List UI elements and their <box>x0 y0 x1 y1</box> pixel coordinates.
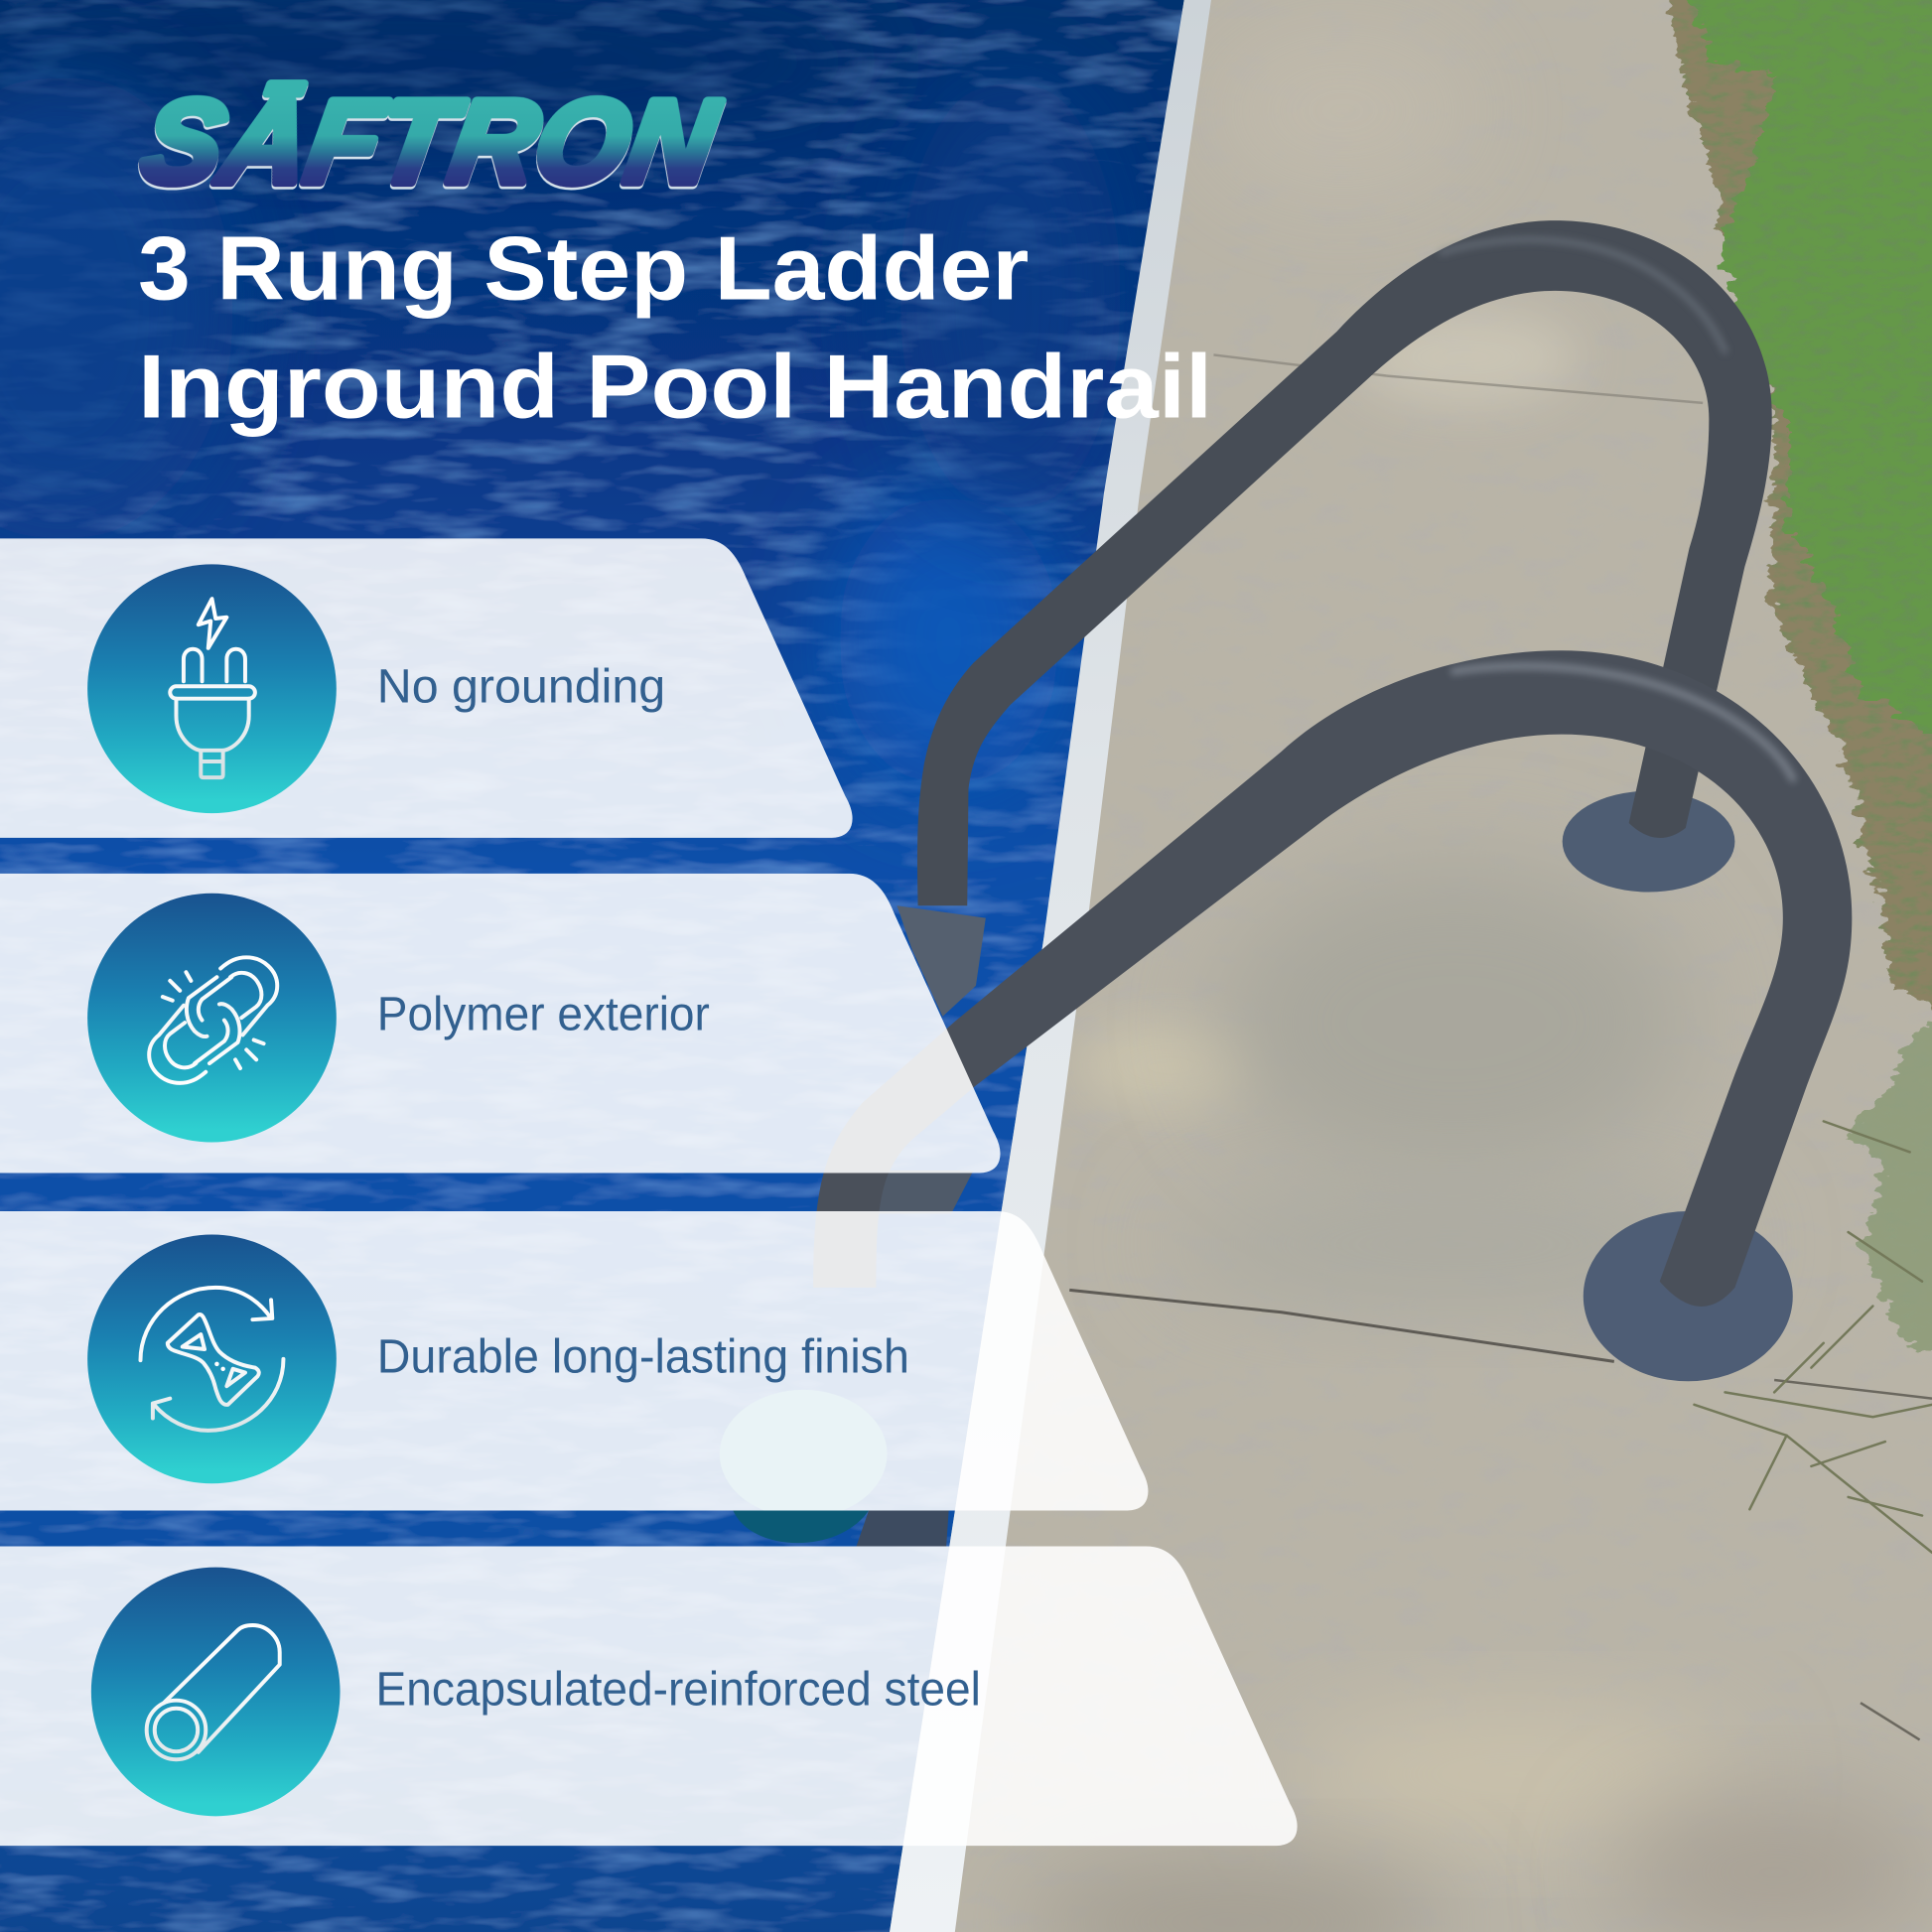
text: polymer exterior: Polymer exterior <box>377 988 710 1041</box>
text: encapsulated-reinforced steel: Encapsulated-reinforced steel <box>376 1663 981 1717</box>
panel: durable finish <box>0 1211 1148 1511</box>
panel 3 background <box>0 1211 1148 1511</box>
rear rail base flange <box>1563 791 1734 893</box>
icon: hourglass with circular arrows <box>87 1235 337 1483</box>
stone under rear rail <box>897 905 986 1017</box>
text: no grounding: No grounding <box>377 659 665 713</box>
concrete cracks <box>1069 354 1932 1739</box>
icon: plug with lightning bolt <box>87 564 337 813</box>
stone under front rail <box>876 1171 973 1213</box>
pool water <box>0 0 1184 1932</box>
title <box>138 219 1212 438</box>
grass lawn <box>1688 0 1932 758</box>
panel 2 background <box>0 874 1001 1173</box>
skimmer: dark base <box>733 1511 869 1543</box>
rear rail tube <box>917 220 1772 905</box>
rear handrail <box>917 220 1772 905</box>
sparse grass lower right <box>1849 1011 1932 1355</box>
title line 1: 3 Rung Step Ladder <box>138 219 1029 320</box>
panel: polymer exterior <box>0 874 1001 1173</box>
dirt strip <box>1657 0 1932 1023</box>
water tone patches <box>0 0 1121 788</box>
text: durable long-lasting finish: Durable long-lasting finish <box>377 1330 909 1384</box>
concrete light and shade patches <box>1023 25 1932 1932</box>
front rail base flange <box>1584 1211 1793 1381</box>
rear rail sheen <box>1442 239 1725 351</box>
panel 4 background <box>0 1547 1298 1846</box>
stone below skimmer <box>857 1511 949 1547</box>
front rail tube <box>813 650 1852 1307</box>
skimmer: disc under panel <box>720 1390 888 1518</box>
panel 1 background <box>0 538 853 838</box>
logo: Saftron wordmark: SĀFTRON <box>134 75 727 208</box>
pool coping <box>890 0 1211 1932</box>
panel: encapsulated steel <box>0 1547 1298 1846</box>
icon: steel pipe <box>91 1568 341 1816</box>
icon: chain links <box>87 894 337 1142</box>
panel: no grounding <box>0 538 853 838</box>
front handrail <box>813 650 1852 1381</box>
front rail sheen <box>1453 666 1793 778</box>
title line 2: Inground Pool Handrail <box>138 338 1212 438</box>
stray grass twigs <box>1694 1121 1932 1553</box>
